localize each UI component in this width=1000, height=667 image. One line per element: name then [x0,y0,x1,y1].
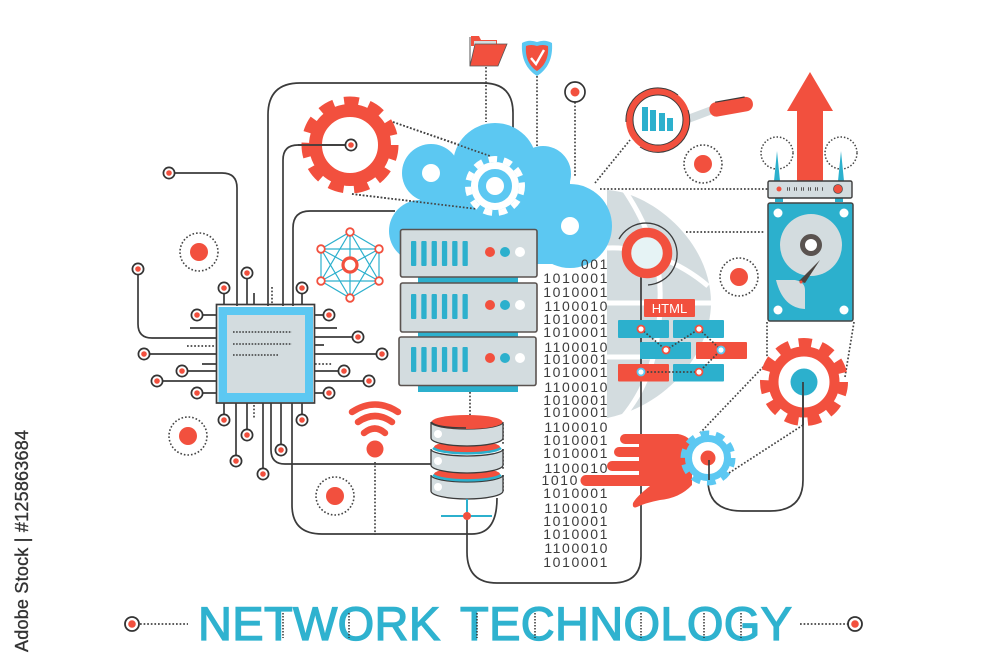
html label [644,299,695,317]
gear: in cloud [468,159,522,213]
chip pins [138,267,388,480]
binary column: 1010001 [543,270,609,286]
title left node [125,617,188,631]
server rack [399,230,537,392]
binary column: 1010001 [543,284,609,300]
binary column: 1010001 [543,364,609,380]
binary column: 001 [581,256,609,272]
divider: lower [433,468,501,480]
binary column: 1100010 [544,540,609,556]
node: top centre [565,82,585,102]
gear: large red [298,102,394,188]
binary column: 1010001 [543,432,609,448]
dotted target: left [180,233,218,271]
divider: upper [433,441,501,453]
disk 3 [431,475,503,499]
globe [607,188,713,418]
wifi icon [352,404,398,458]
database [431,415,503,520]
connection lines [138,83,803,583]
bar chart [642,107,673,131]
target ring [619,223,677,285]
binary column: 1010001 [543,392,609,408]
binary column: 1010001 [543,485,609,501]
binary column: 1010001 [543,526,609,542]
binary column: 1010001 [543,404,609,420]
hand [580,434,692,508]
dotted target: right upper [684,145,722,183]
html label: HTML [652,301,687,316]
server unit 3 [399,337,536,392]
binary column: 1010001 [543,351,609,367]
binary column: 1100010 [544,339,609,355]
dotted target: right middle [720,258,758,296]
binary column: 1010 [541,472,579,488]
binary column: 1010001 [543,513,609,529]
disk 2 [431,449,503,473]
server unit 1 [400,230,537,283]
binary column [541,256,609,570]
folder icon [470,36,507,66]
binary column: 1100010 [544,379,609,395]
binary column: 1010001 [543,311,609,327]
binary column: 1010001 [543,324,609,340]
gear: right red [764,342,844,425]
binary column: 1100010 [544,419,609,435]
title: NETWORK TECHNOLOGY [198,597,792,650]
binary column: 1100010 [544,460,609,476]
vertical stock id text: Adobe Stock | #125863684 [12,430,32,652]
disk 1 [431,415,503,446]
binary column: 1100010 [544,500,609,516]
title right node [800,617,862,631]
dotted connectors [352,67,854,535]
router [761,137,857,202]
binary column: 1010001 [543,554,609,570]
shield icon [522,41,552,76]
binary column: 1010001 [543,445,609,461]
node: top left [163,167,175,179]
node: far left [132,263,144,275]
binary column: 1100010 [544,298,609,314]
up arrow [787,72,833,182]
server unit 2 [400,283,537,338]
cloud [352,122,612,268]
network tee [441,499,492,520]
magnifier with bar chart [626,88,754,152]
disk highlights [434,430,442,491]
hard drive [768,203,853,321]
dotted target: lower middle [316,477,354,515]
dotted target: lower left [169,417,207,455]
code brick wall [618,320,747,382]
network hexagon [317,228,383,302]
microchip [138,267,388,480]
gear: blue [684,434,732,482]
